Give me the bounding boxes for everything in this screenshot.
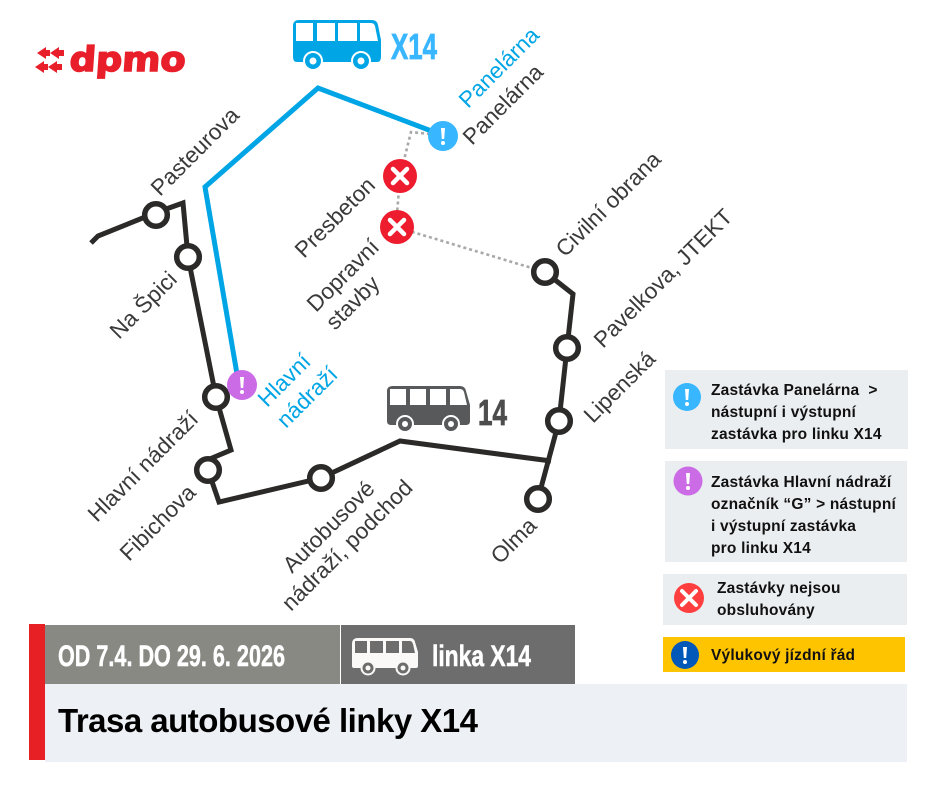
route: blue line X14 xyxy=(205,88,442,374)
stop labels: black: Hlavní nádraží xyxy=(83,406,204,527)
icon: Dopravní stavby closed xyxy=(380,210,414,244)
legend: closed stops: Zastávky nejsou xyxy=(717,580,841,597)
icon: Hlavní nádraží stop xyxy=(227,370,257,400)
legend: replacement timetable xyxy=(663,637,905,672)
stop labels: black: Autobusové xyxy=(278,476,380,578)
stop labels: black: Pavelkova, JTEKT xyxy=(589,204,738,353)
icon: blue bus X14 xyxy=(293,20,381,70)
line banner: linka X14 xyxy=(432,640,531,673)
line banner xyxy=(341,625,575,684)
title: Trasa autobusové linky X14 xyxy=(58,702,479,739)
stop labels: black: Fibichova xyxy=(115,479,201,566)
legend: Hlavní nádraží: i výstupní zastávka xyxy=(711,518,856,535)
legend: closed stops: obsluhovány xyxy=(717,602,815,619)
stop labels: black: Na Špici xyxy=(105,267,182,344)
stops: line 14 circles xyxy=(145,204,578,510)
stop labels: black: Civilní obrana xyxy=(551,146,666,262)
stop labels: black: Panelárna xyxy=(458,59,548,150)
icon: Panelárna stop xyxy=(428,121,458,151)
logo: dpmo: dpmo xyxy=(68,40,187,80)
route: dotted closed section xyxy=(396,132,545,272)
stop labels: black: nádraží, podchod xyxy=(277,475,417,616)
title panel background xyxy=(45,684,907,762)
date banner xyxy=(45,625,340,684)
legend: Hlavní nádraží xyxy=(665,461,907,562)
stop labels: blue: nádraží xyxy=(272,361,343,433)
legend: Panelárna: Zastávka Panelárna > xyxy=(711,382,878,399)
legend: Panelárna xyxy=(665,370,908,449)
legend: closed stops xyxy=(663,574,907,625)
stop labels: black: Presbeton xyxy=(290,172,380,263)
route: black line 14 xyxy=(91,203,573,502)
red accent bar xyxy=(29,624,45,760)
legend: replacement timetable: Výlukový jízdní řád xyxy=(711,647,855,664)
stop labels: black: Pasteurova xyxy=(146,102,244,201)
stop labels: black: Dopravní xyxy=(302,234,385,317)
stop labels: black xyxy=(83,59,738,616)
date banner: OD 7.4. DO 29. 6. 2026 xyxy=(58,640,285,673)
label: 14: 14 xyxy=(478,392,507,433)
legend: Hlavní nádraží: označník “G” > nástupní xyxy=(711,496,897,513)
stop labels: blue: Hlavní xyxy=(253,348,316,412)
stop labels: black: stavby xyxy=(321,270,385,335)
legend: Hlavní nádraží: pro linku X14 xyxy=(711,540,811,557)
stop labels: blue xyxy=(253,22,544,433)
stop labels: blue: Panelárna xyxy=(454,22,544,113)
legend: Panelárna: nástupní i výstupní xyxy=(711,404,857,421)
label: X14 blue: X14 xyxy=(391,26,437,67)
legend: Panelárna: zastávka pro linku X14 xyxy=(711,426,882,443)
stop labels: black: Lipenská xyxy=(579,346,661,428)
legend: Hlavní nádraží: Zastávka Hlavní nádraží xyxy=(711,474,892,491)
icon: grey bus 14 xyxy=(387,386,470,432)
stop labels: black: Olma xyxy=(486,513,542,569)
icon: Presbeton closed xyxy=(383,159,417,193)
